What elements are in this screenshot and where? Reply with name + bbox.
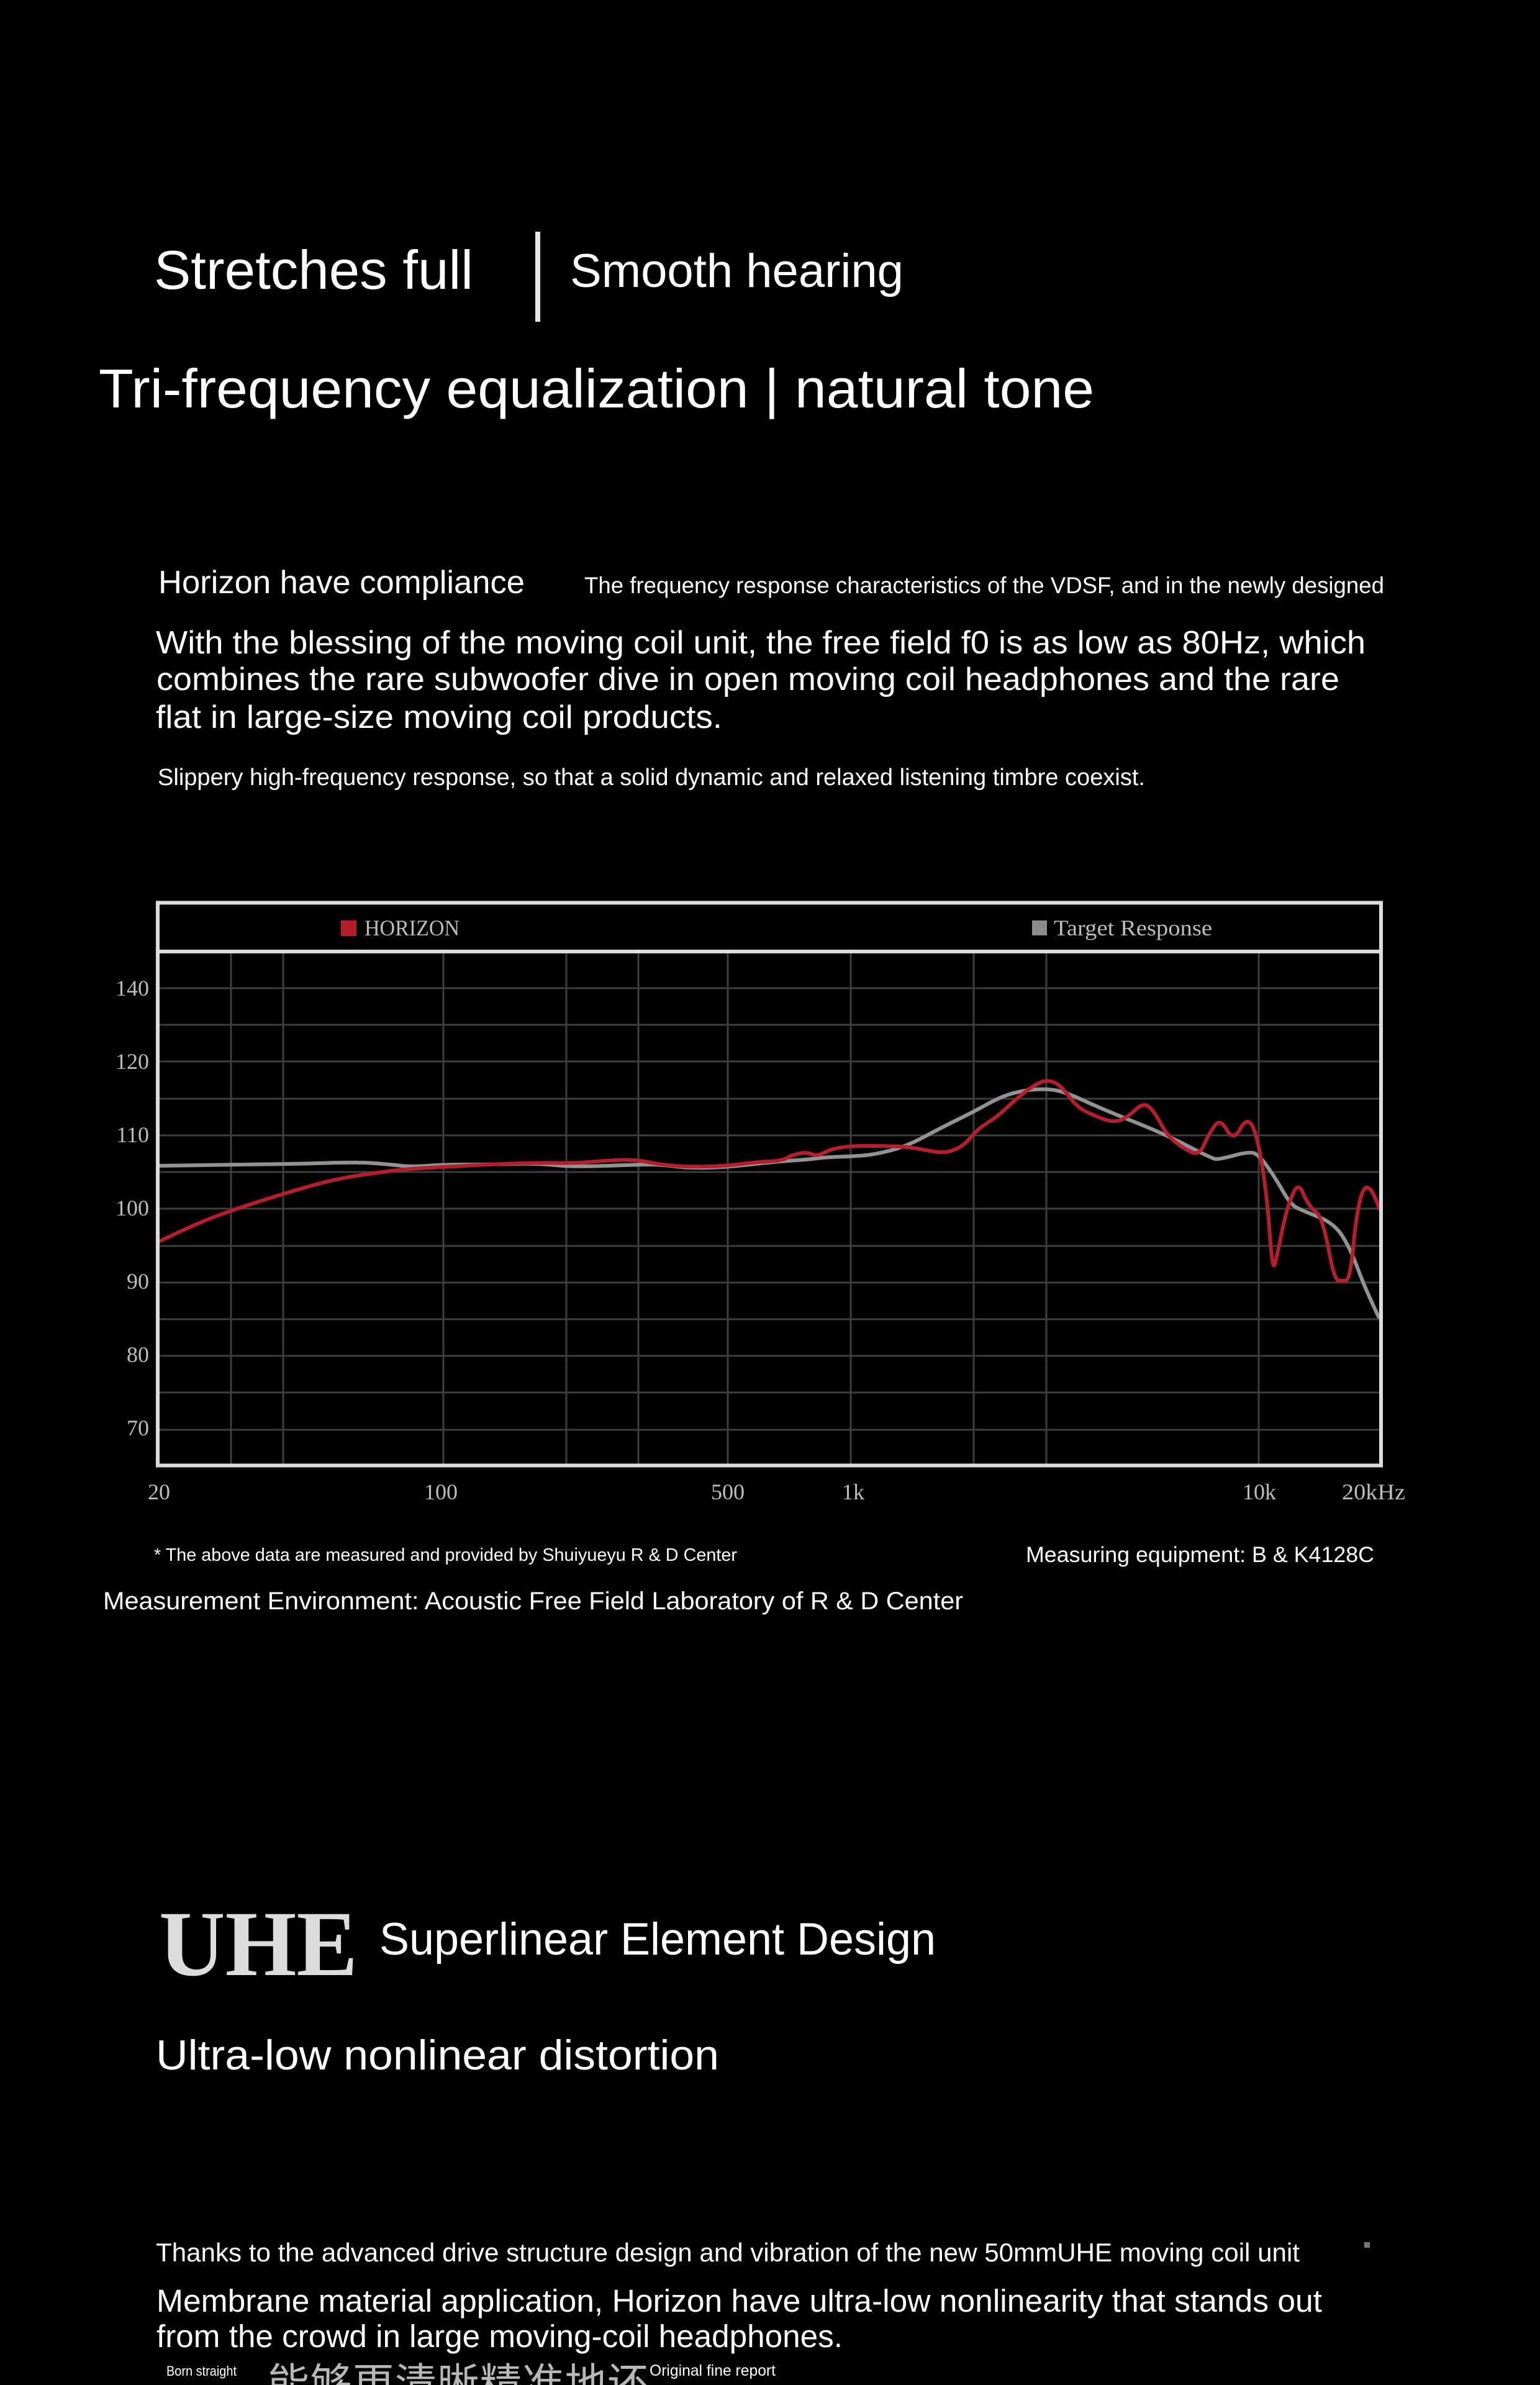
- chart grid: [158, 952, 1381, 1465]
- y axis labels: 80: [127, 1342, 149, 1367]
- footnote: measurement environment: Measurement Environment: Acoustic Free Field Laboratory of R & D Center: [103, 1588, 963, 1615]
- x axis labels: 500: [711, 1479, 745, 1504]
- x axis labels: 100: [424, 1479, 458, 1504]
- x axis labels: 20: [148, 1479, 170, 1504]
- x axis labels: 1k: [842, 1479, 864, 1504]
- x axis labels: [148, 1479, 1405, 1504]
- text block: membrane material paragraph: from the crowd in large moving-coil headphones.: [156, 2319, 843, 2354]
- text: drive structure: Thanks to the advanced drive structure design and vibration of the new 50mmUHE moving coil unit: [156, 2238, 1300, 2267]
- heading: Tri-frequency equalization: Tri-frequency equalization | natural tone: [99, 358, 1094, 419]
- heading: Ultra-low nonlinear distortion: Ultra-low nonlinear distortion: [156, 2032, 719, 2079]
- subheading: Horizon have compliance: Horizon have compliance: [158, 565, 525, 601]
- chart: frequency response: [116, 903, 1405, 1504]
- heading: Stretches full: Stretches full: [154, 239, 473, 301]
- y axis labels: 100: [116, 1196, 149, 1220]
- caption: Born straight: Born straight: [166, 2363, 237, 2379]
- caption: Original fine report: Original fine report: [650, 2362, 776, 2379]
- text block: moving coil paragraph: combines the rare subwoofer dive in open moving coil headphones and the rare: [156, 661, 1339, 697]
- footnote: data source: * The above data are measured and provided by Shuiyueyu R & D Center: [154, 1545, 737, 1565]
- footnote: measuring equipment: Measuring equipment: B & K4128C: [1026, 1543, 1374, 1567]
- text: high-frequency response: Slippery high-frequency response, so that a solid dynamic and relaxed listening timbre coexist.: [158, 765, 1145, 791]
- x axis labels: 10k: [1243, 1479, 1276, 1504]
- legend: Horizon: HORIZON: [365, 915, 460, 940]
- y axis labels: 90: [127, 1269, 149, 1294]
- heading: Superlinear Element Design: Superlinear Element Design: [379, 1914, 936, 1965]
- heading: Smooth hearing: Smooth hearing: [570, 245, 904, 298]
- text: frequency response intro: The frequency response characteristics of the VDSF, and in the newly designed: [584, 573, 1384, 598]
- text block: membrane material paragraph: Membrane material application, Horizon have ultra-low nonlinearity that stands out: [156, 2283, 1322, 2319]
- text block: moving coil paragraph: [156, 625, 1366, 735]
- text block: moving coil paragraph: flat in large-size moving coil products.: [156, 699, 722, 735]
- y axis labels: 110: [116, 1122, 149, 1147]
- y axis labels: 120: [116, 1049, 149, 1074]
- chart frame: [158, 903, 1381, 1466]
- y axis labels: [116, 976, 149, 1440]
- text block: membrane material paragraph: [156, 2283, 1322, 2354]
- x axis labels: 20kHz: [1342, 1479, 1405, 1504]
- horizon response curve: [159, 1081, 1379, 1281]
- heading divider bar: [535, 232, 540, 322]
- target response curve: [159, 1089, 1379, 1317]
- logo text: UHE: UHE: [159, 1892, 358, 1996]
- legend: Target Response: Target Response: [1054, 915, 1212, 940]
- y axis labels: 140: [116, 976, 149, 1001]
- text block: moving coil paragraph: With the blessing of the moving coil unit, the free field f0 is as low as 80Hz, which: [156, 625, 1366, 661]
- y axis labels: 70: [127, 1415, 149, 1440]
